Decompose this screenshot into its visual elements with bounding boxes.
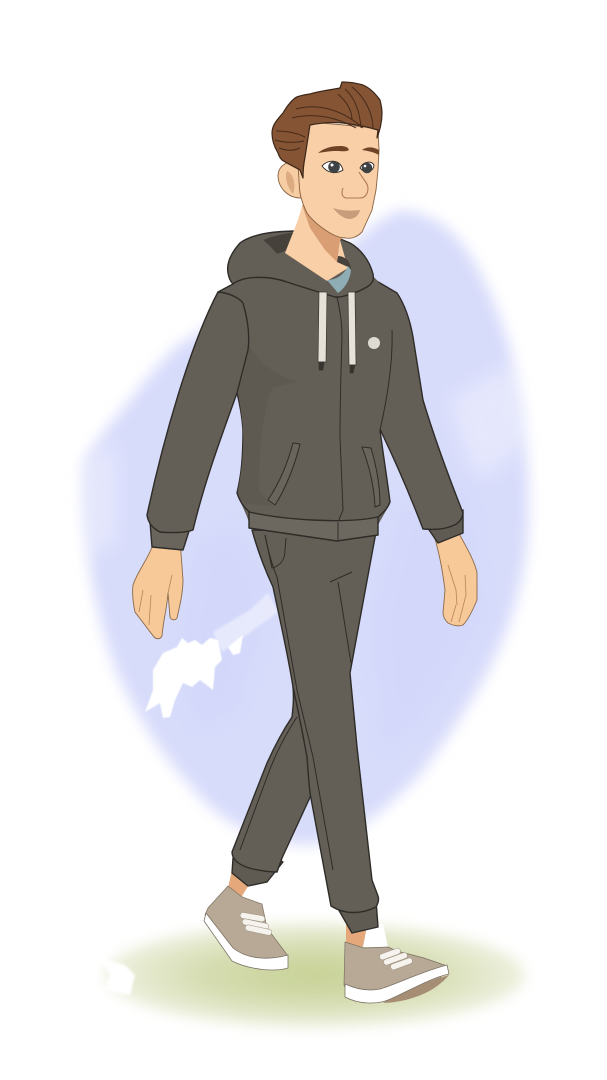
torso fill — [218, 262, 394, 525]
front shoe sole — [345, 965, 449, 1003]
splatter: main — [145, 638, 222, 718]
back shoe — [204, 870, 288, 970]
torso shading — [238, 340, 298, 506]
hood right inner shadow — [337, 256, 351, 272]
front leg seam — [265, 535, 333, 870]
hoodie drawstrings — [318, 292, 356, 373]
front sock — [346, 922, 366, 947]
pants pocket — [265, 535, 286, 568]
hoodie badge — [368, 337, 380, 349]
head — [272, 82, 382, 238]
mouth — [333, 208, 360, 219]
left sleeve fabric — [147, 292, 249, 533]
left cuff — [150, 522, 190, 550]
back leg fabric — [232, 687, 320, 872]
hood inner shadow — [263, 232, 297, 254]
background: lavender watercolor wash — [80, 210, 530, 845]
left hand — [133, 540, 183, 639]
t-shirt collar — [327, 266, 351, 293]
front shoe underside — [383, 975, 449, 1003]
right sleeve fabric — [370, 280, 463, 529]
front leg cuff — [333, 900, 378, 933]
front shoe collar — [363, 924, 388, 947]
hoodie torso — [218, 262, 394, 541]
right arm sleeve — [370, 280, 463, 543]
hood — [228, 231, 373, 297]
zipper seam — [337, 297, 343, 522]
ground: green grass ellipse — [100, 923, 525, 1027]
back shoe sole — [204, 913, 288, 970]
back shoe laces — [240, 912, 272, 936]
back leg — [232, 687, 320, 886]
front shoe upper — [344, 942, 447, 994]
torso outline — [218, 284, 390, 517]
hair — [272, 82, 382, 178]
left eyebrow — [318, 146, 349, 153]
ear — [278, 162, 301, 198]
wash: pale highlights — [80, 360, 530, 560]
right eye — [360, 162, 374, 172]
left eye — [322, 161, 343, 173]
front shoe — [344, 922, 449, 1003]
hoodie hem — [249, 512, 378, 541]
splatter: faint band — [213, 593, 278, 652]
splatter: small — [228, 635, 243, 655]
back shoe upper — [205, 886, 288, 965]
pants crease — [330, 572, 352, 663]
wash: darker mottling — [175, 480, 490, 760]
neck — [285, 203, 348, 281]
front leg fabric — [252, 530, 379, 912]
left finger lines — [139, 575, 172, 625]
face — [298, 122, 379, 238]
left arm sleeve — [147, 292, 249, 550]
background: white brush splatter — [145, 593, 278, 718]
hoodie pockets — [268, 443, 380, 507]
neck shadow — [302, 205, 348, 262]
nose — [342, 172, 368, 198]
back leg cuff — [232, 855, 283, 886]
right hand — [434, 528, 477, 626]
right cuff — [425, 510, 463, 543]
front shoe laces — [379, 947, 413, 971]
front leg — [252, 530, 379, 933]
ground: white patch — [100, 958, 135, 995]
right finger lines — [448, 565, 466, 622]
back shoe collar — [242, 880, 264, 905]
back leg seam — [240, 717, 297, 850]
right chest seam — [380, 330, 392, 430]
back sock — [228, 870, 256, 905]
hair strands — [275, 87, 373, 150]
right eyebrow — [362, 147, 379, 155]
